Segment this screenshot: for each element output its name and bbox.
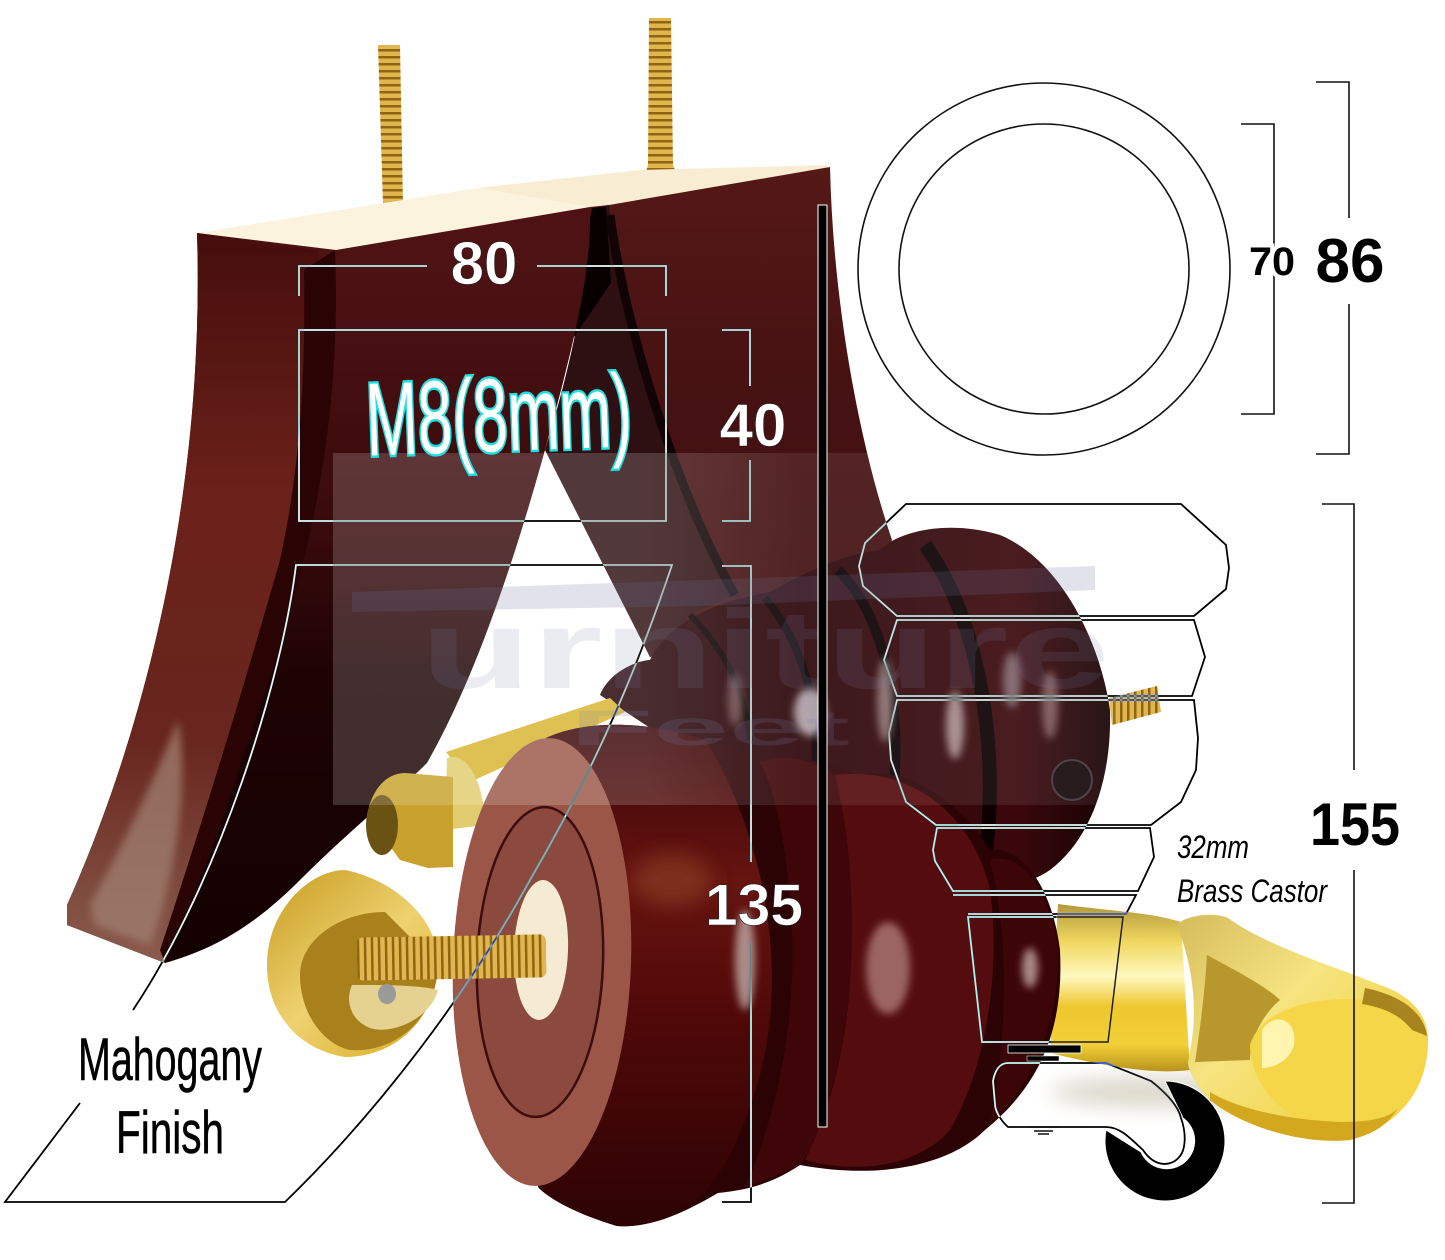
callout text: Mahogany Finish: Finish [116,1099,224,1166]
label: M8(8mm): M8(8mm) [364,353,634,479]
label: 135: 135 [705,873,803,938]
leg profile outline with mahogany callout [5,565,672,1202]
dimension bracket: 135 [722,566,751,1202]
dimension bracket: 86 [1316,82,1349,454]
photo: right brass castor [1050,904,1428,1141]
callout text: Mahogany Finish [78,1026,262,1166]
photo: rear castor [267,698,625,1057]
label: 40: 40 [720,392,786,459]
photo: rear bun foot [600,528,1161,886]
label: 155: 155 [1310,791,1400,858]
label: 32mm brass castor: 32mm [1177,829,1249,865]
photo: right wedge leg [478,18,892,657]
vertical divider bar [818,205,827,1127]
watermark: translucent logo panel: Feet [570,700,851,756]
dimension bracket: 80 wide [299,266,666,296]
top view circles [858,83,1230,455]
watermark: translucent logo panel [333,453,1115,805]
base rectangle outline [299,330,666,521]
label: 32mm brass castor [1177,829,1328,909]
dimension bracket: 70 [1241,124,1274,414]
label: 86: 86 [1316,227,1384,296]
photo: left wedge leg [67,45,590,963]
taper outline over brass [1052,917,1123,1042]
label: 70: 70 [1249,240,1295,284]
watermark: translucent logo panel: urniture [420,587,1110,712]
label: 80: 80 [451,230,517,297]
dimension bracket: 155 [1322,504,1354,1203]
label: 32mm brass castor: Brass Castor [1177,873,1328,909]
photo: front bun foot [357,725,1060,1226]
castor line drawing [993,1045,1225,1201]
dimension bracket: 40 [722,330,750,521]
callout text: Mahogany Finish: Mahogany [78,1026,262,1093]
side profile outline of leg [859,504,1229,1042]
